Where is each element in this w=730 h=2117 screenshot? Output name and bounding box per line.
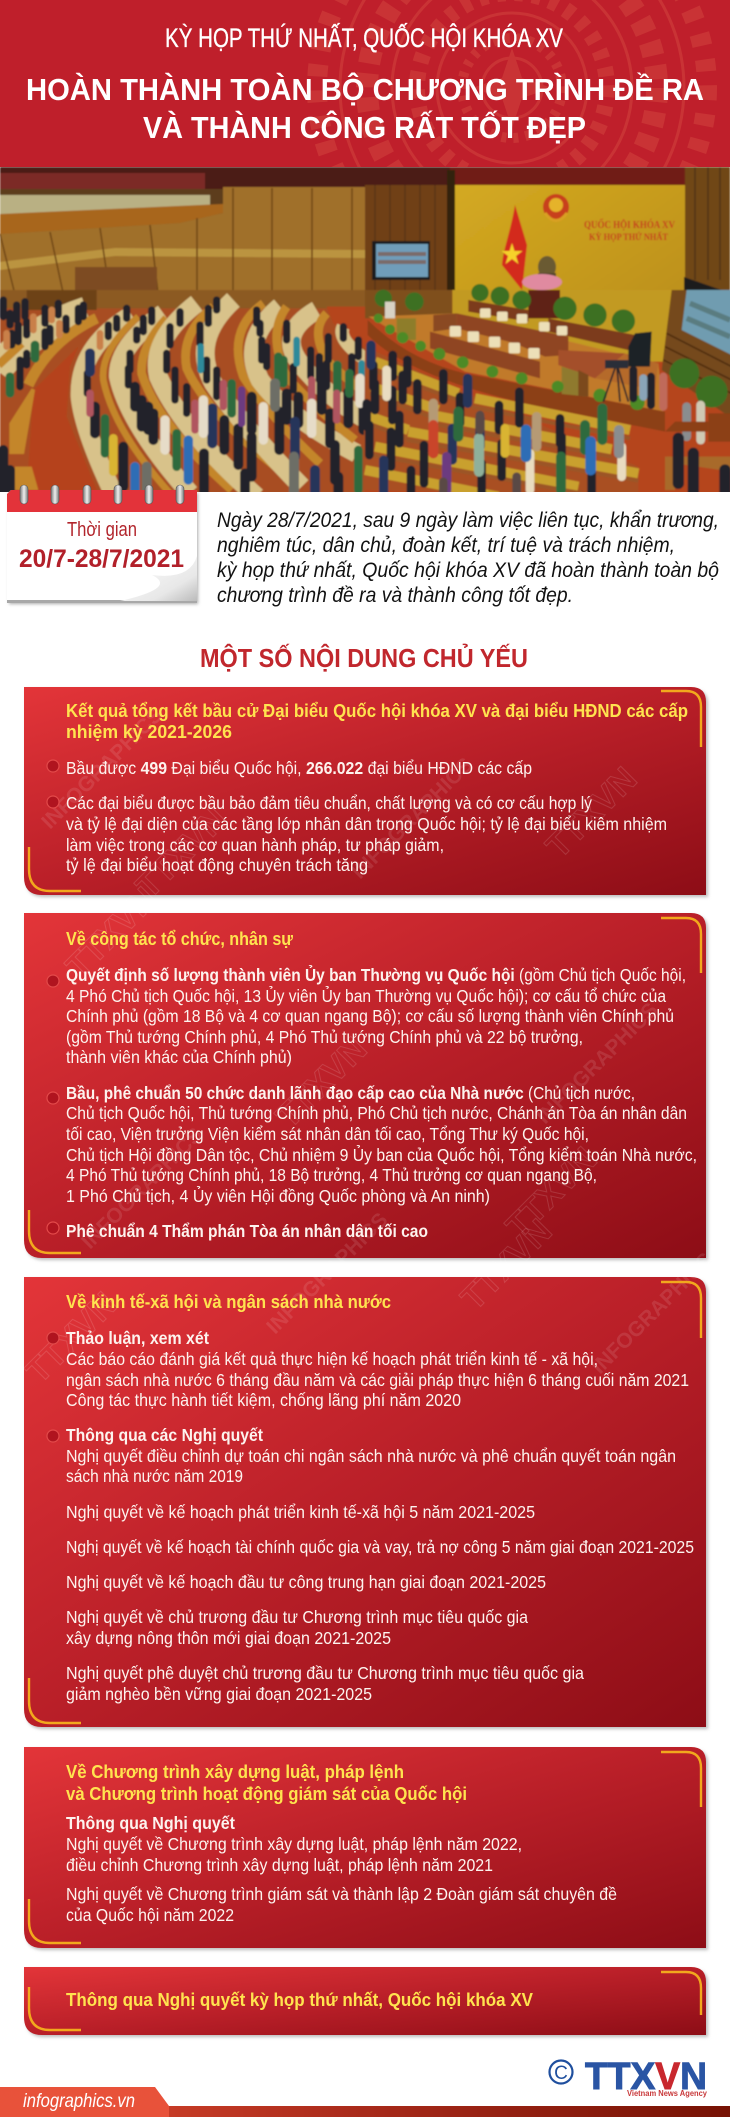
intro paragraph: chương trình đề ra và thành công tốt đẹp. — [217, 584, 573, 607]
bronze drum pattern — [308, 0, 717, 167]
panel: election results: INFOGRAPHICS — [347, 753, 477, 884]
intro paragraph — [217, 509, 719, 607]
calendar red band — [7, 490, 197, 512]
photo: National Assembly hall — [0, 167, 730, 497]
resolutions text: điều chỉnh Chương trình xây dựng luật, pháp lệnh năm 2021 — [66, 1855, 493, 1875]
bullet: Standing Committee members: Chính phủ (gồm 18 Bộ và 4 cơ quan ngang Bộ); cơ cấu số lượng thành viên Chính phủ — [66, 1006, 674, 1026]
bullet: resolutions: sách nhà nước năm 2019 — [66, 1466, 243, 1486]
panel heading: Về kinh tế-xã hội và ngân sách nhà nước — [66, 1292, 391, 1312]
bullet: Standing Committee members: thành viên khác của Chính phủ) — [66, 1047, 292, 1067]
bullet: 50 senior leadership titles: 4 Phó Thủ tướng Chính phủ, 18 Bộ trưởng, 4 Thủ trưởng cơ quan ngang Bộ, — [66, 1165, 597, 1185]
calendar — [7, 485, 198, 604]
panel: organisation and personnel: TTXVN — [499, 1140, 604, 1246]
bullet: 50 senior leadership titles — [47, 1083, 697, 1206]
panel heading — [66, 1762, 467, 1804]
panel: socio-economy and budget: TTXVN — [454, 1212, 559, 1318]
panel: law-making and supervision programme — [24, 1747, 708, 1950]
copyright mark: C — [554, 2063, 568, 2084]
bullet: discussion: Các báo cáo đánh giá kết quả thực hiện kế hoạch phát triển kinh tế - xã hội, — [66, 1349, 598, 1369]
bullet: discussion: Thảo luận, xem xét — [66, 1328, 209, 1348]
footer site name: infographics.vn — [23, 2091, 135, 2112]
intro paragraph: nghiêm túc, dân chủ, đoàn kết, trí tuệ và trách nhiệm, — [217, 534, 675, 557]
panel: election results: INFOGRAPHICS — [37, 703, 167, 834]
panel: election results: TTXVN — [539, 760, 644, 866]
resolutions text: Thông qua Nghị quyết — [66, 1813, 235, 1833]
bullet: Supreme Court judges: Phê chuẩn 4 Thẩm phán Tòa án nhân dân tối cao — [66, 1221, 428, 1241]
panel heading: Về Chương trình xây dựng luật, pháp lệnh — [66, 1762, 404, 1782]
panel heading: Về công tác tổ chức, nhân sự — [66, 929, 294, 949]
bullet: resolutions — [47, 1425, 694, 1704]
panel: socio-economy and budget — [19, 1208, 717, 1729]
panel heading: và Chương trình hoạt động giám sát của Quốc hội — [66, 1784, 467, 1804]
panel: election results — [24, 687, 708, 906]
resolutions text: Nghị quyết về Chương trình xây dựng luật, pháp lệnh năm 2022, — [66, 1834, 522, 1854]
photo: National Assembly hall: QUỐC HỘI KHÓA XV — [584, 218, 676, 231]
bullet: delegates elected: Bầu được 499 Đại biểu Quốc hội, 266.022 đại biểu HĐND các cấp — [66, 758, 532, 778]
bullet: discussion: Công tác thực hành tiết kiệm, chống lãng phí năm 2020 — [66, 1390, 461, 1410]
bullet: resolutions: Nghị quyết về chủ trương đầu tư Chương trình mục tiêu quốc gia — [66, 1607, 528, 1627]
agency name: Vietnam News Agency — [627, 2088, 707, 2098]
resolutions text — [66, 1813, 617, 1925]
footer tab — [0, 2087, 169, 2117]
panel: organisation and personnel: INFOGRAPHICS — [77, 1123, 207, 1254]
bullet: delegate quality: làm việc trong các cơ quan hành pháp, tư pháp giảm, — [66, 835, 444, 855]
subtitle: KỲ HỌP THỨ NHẤT, QUỐC HỘI KHÓA XV — [165, 23, 563, 53]
resolutions text: của Quốc hội năm 2022 — [66, 1905, 234, 1925]
bullet: discussion — [47, 1328, 689, 1410]
photo: National Assembly hall: KỲ HỌP THỨ NHẤT — [589, 232, 668, 242]
panel: socio-economy and budget: INFOGRAPHICS — [262, 1208, 392, 1339]
panel heading — [66, 701, 688, 742]
panel: organisation and personnel: INFOGRAPHICS — [532, 998, 662, 1129]
calendar page — [7, 490, 197, 603]
bullet: delegate quality: tỷ lệ đại biểu hoạt động chuyên trách tăng — [66, 855, 368, 875]
bullet: delegate quality — [47, 793, 667, 875]
header banner — [0, 0, 730, 167]
bullet: 50 senior leadership titles: 1 Phó Chủ tịch, 4 Ủy viên Hội đồng Quốc phòng và An ninh) — [66, 1185, 490, 1206]
copyright mark — [550, 2060, 572, 2084]
bullet: resolutions: xây dựng nông thôn mới giai đoạn 2021-2025 — [66, 1628, 391, 1648]
bullet: Standing Committee members — [47, 964, 686, 1067]
bullet: 50 senior leadership titles: Bầu, phê chuẩn 50 chức danh lãnh đạo cấp cao của Nhà nước (Chủ tịch nước, — [66, 1083, 635, 1103]
panel: socio-economy and budget: INFOGRAPHICS — [587, 1248, 717, 1379]
calendar dates: 20/7-28/7/2021 — [19, 545, 184, 573]
panel heading: nhiệm kỳ 2021-2026 — [66, 722, 232, 742]
wordmark: TTXVN — [585, 2056, 707, 2098]
bullet: resolutions: Thông qua các Nghị quyết — [66, 1425, 263, 1445]
bullet: resolutions: giảm nghèo bền vững giai đoạn 2021-2025 — [66, 1684, 372, 1704]
calendar rings — [20, 485, 184, 504]
bullet: Standing Committee members: 4 Phó Chủ tịch Quốc hội, 13 Ủy viên Ủy ban Thường vụ Quốc hội); cơ cấu tổ chức của — [66, 985, 666, 1006]
panel: session resolution — [24, 1967, 708, 2037]
resolutions text: Nghị quyết về Chương trình giám sát và thành lập 2 Đoàn giám sát chuyên đề — [66, 1884, 617, 1904]
main title: VÀ THÀNH CÔNG RẤT TỐT ĐẸP — [143, 109, 586, 145]
panel heading: Kết quả tổng kết bầu cử Đại biểu Quốc hội khóa XV và đại biểu HĐND các cấp — [66, 701, 688, 721]
bullet: 50 senior leadership titles: tối cao, Viện trưởng Viện kiểm sát nhân dân tối cao, Tổng Thư ký Quốc hội, — [66, 1124, 589, 1144]
section heading: MỘT SỐ NỘI DUNG CHỦ YẾU — [200, 642, 528, 673]
left half of hall: curved seat rows — [0, 290, 367, 497]
main title: HOÀN THÀNH TOÀN BỘ CHƯƠNG TRÌNH ĐỀ RA — [26, 71, 704, 107]
panel: organisation and personnel: TTXVN — [269, 1030, 374, 1136]
panel: organisation and personnel: TTXVN — [59, 880, 164, 986]
bullet: resolutions: Nghị quyết về kế hoạch đầu tư công trung hạn giai đoạn 2021-2025 — [66, 1572, 546, 1592]
bullet: delegate quality: Các đại biểu được bầu bảo đảm tiêu chuẩn, chất lượng và có cơ cấu hợp lý — [66, 793, 592, 813]
panel heading: Thông qua Nghị quyết kỳ họp thứ nhất, Quốc hội khóa XV — [66, 1990, 533, 2010]
main title — [26, 71, 704, 145]
panel: election results: TTXVN — [129, 800, 234, 906]
bullet: resolutions: Nghị quyết phê duyệt chủ trương đầu tư Chương trình mục tiêu quốc gia — [66, 1663, 584, 1683]
bullet: Standing Committee members: (gồm Thủ tướng Chính phủ, 4 Phó Thủ tướng Chính phủ và 22 bộ trưởng, — [66, 1027, 583, 1047]
panel: organisation and personnel — [24, 880, 708, 1260]
bullet: Standing Committee members: Quyết định số lượng thành viên Ủy ban Thường vụ Quốc hội (gồm Chủ tịch Quốc hội, — [66, 964, 686, 985]
panel: socio-economy and budget: TTXVN — [19, 1285, 124, 1391]
page curl — [120, 556, 197, 601]
logo: TTXVN — [550, 2056, 707, 2098]
bullet: delegate quality: và tỷ lệ đại diện của các tầng lớp nhân dân trong Quốc hội; tỷ lệ đại biểu kiêm nhiệm — [66, 814, 667, 834]
footer bar — [0, 2087, 730, 2117]
bullet: resolutions: Nghị quyết điều chỉnh dự toán chi ngân sách nhà nước và phê chuẩn quyết toán ngân — [66, 1446, 676, 1466]
right half of hall: stage and front rows — [363, 284, 730, 497]
calendar label: Thời gian — [67, 519, 137, 541]
bullet: resolutions: Nghị quyết về kế hoạch phát triển kinh tế-xã hội 5 năm 2021-2025 — [66, 1502, 535, 1522]
